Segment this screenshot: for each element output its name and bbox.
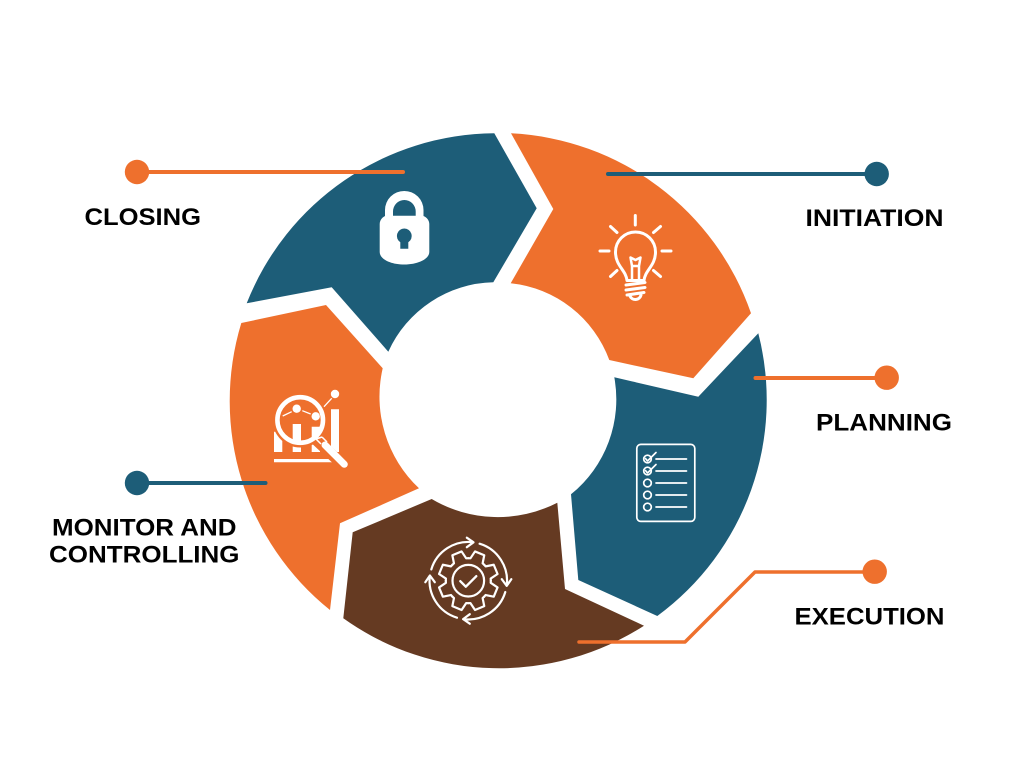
icon: light bulb	[600, 216, 671, 300]
segment: execution	[343, 499, 644, 668]
callout: monitor and controlling	[49, 471, 266, 569]
icon: padlock	[380, 191, 429, 264]
callout: initiation: INITIATION	[806, 205, 944, 232]
panel: cycle ring	[230, 133, 767, 668]
icon: gear with cycle arrows	[425, 538, 511, 624]
callout: closing: CLOSING	[84, 204, 201, 231]
segment: monitor and controlling	[230, 305, 419, 610]
callout: closing	[84, 160, 403, 231]
icon: magnifier over bar chart	[274, 390, 346, 468]
segment: initiation	[511, 133, 751, 378]
callout: planning: PLANNING	[816, 410, 952, 437]
callout: execution: EXECUTION	[794, 604, 944, 630]
icon: checklist	[637, 444, 695, 521]
callout: initiation	[608, 162, 944, 232]
callout: monitor and controlling: CONTROLLING	[49, 542, 240, 569]
segment: closing	[247, 133, 537, 352]
callout: planning	[756, 366, 952, 437]
segment: planning	[571, 333, 767, 616]
callout: execution	[579, 560, 944, 642]
callout: monitor and controlling: MONITOR AND	[52, 515, 236, 542]
